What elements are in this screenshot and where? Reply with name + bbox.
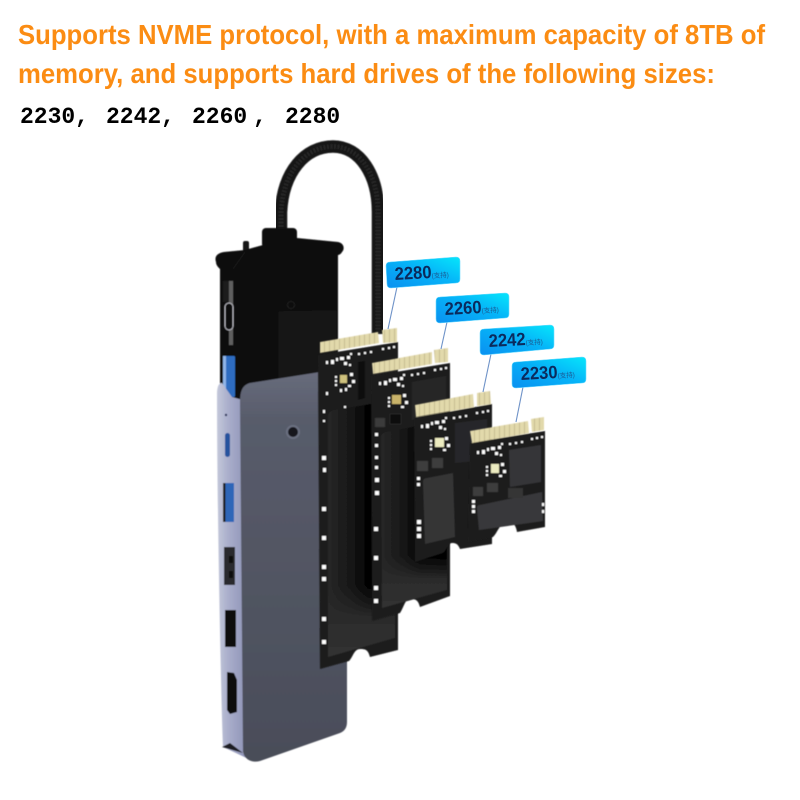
supported sizes list: 2260	[192, 104, 247, 130]
SSD card: 2280	[318, 328, 398, 669]
label: 2280	[386, 257, 460, 288]
label: 2260: 2260(支持)	[444, 296, 499, 319]
cable	[281, 146, 378, 334]
supported sizes list: ,	[75, 104, 89, 130]
label: 2280: 2280(支持)	[394, 261, 449, 284]
SSD card: 2242	[414, 391, 492, 562]
upper ports	[223, 281, 235, 397]
label: 2230	[512, 357, 586, 388]
title: memory, and supports hard drives of the following sizes:	[18, 58, 715, 89]
supported sizes list: 2242	[106, 104, 161, 130]
SSD card: 2260	[371, 348, 450, 621]
supported sizes list: ,	[161, 104, 175, 130]
supported sizes list: ,	[253, 104, 267, 130]
leader lines	[388, 287, 523, 422]
supported sizes list: 2280	[285, 104, 340, 130]
plate screw hole	[286, 425, 300, 439]
black enclosure top	[215, 228, 344, 400]
supported sizes list: 2230	[20, 104, 75, 130]
side ports	[222, 414, 243, 753]
silver side edge	[217, 383, 255, 762]
SSD card: 2230	[468, 417, 545, 542]
grey aluminium plate	[240, 372, 347, 762]
label: 2260	[436, 293, 509, 323]
label: 2242: 2242(支持)	[488, 328, 543, 351]
title	[18, 19, 766, 89]
hub device	[215, 228, 347, 762]
label: 2230: 2230(支持)	[520, 361, 575, 384]
label: 2242	[480, 325, 554, 355]
